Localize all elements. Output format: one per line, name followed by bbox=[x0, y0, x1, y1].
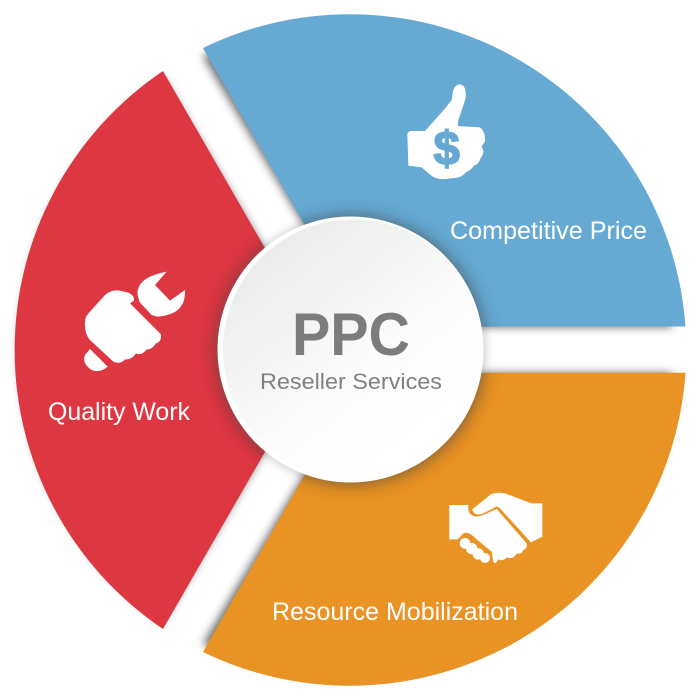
label: quality work: Quality Work bbox=[48, 398, 190, 426]
title: PPC: PPC bbox=[292, 301, 410, 368]
red segment bbox=[15, 71, 300, 629]
center disc shadow bbox=[216, 215, 486, 485]
dollar sign: $ bbox=[434, 122, 460, 175]
disc rim bbox=[218, 216, 484, 482]
subtitle: reseller services: Reseller Services bbox=[260, 369, 442, 394]
panel: quality work bbox=[15, 71, 300, 629]
orange segment bbox=[203, 373, 686, 686]
icon: handshake bbox=[449, 493, 542, 563]
icon: thumbs up with dollar bbox=[407, 84, 485, 179]
panel: resource mobilization bbox=[203, 373, 686, 686]
disc face bbox=[223, 220, 483, 480]
label: resource mobilization: Resource Mobilization bbox=[272, 598, 518, 626]
icon: hand holding wrench bbox=[84, 272, 185, 371]
blue segment bbox=[203, 14, 686, 327]
label: competitive price: Competitive Price bbox=[450, 217, 647, 245]
panel: competitive price bbox=[203, 14, 686, 327]
center disc bbox=[218, 216, 484, 482]
